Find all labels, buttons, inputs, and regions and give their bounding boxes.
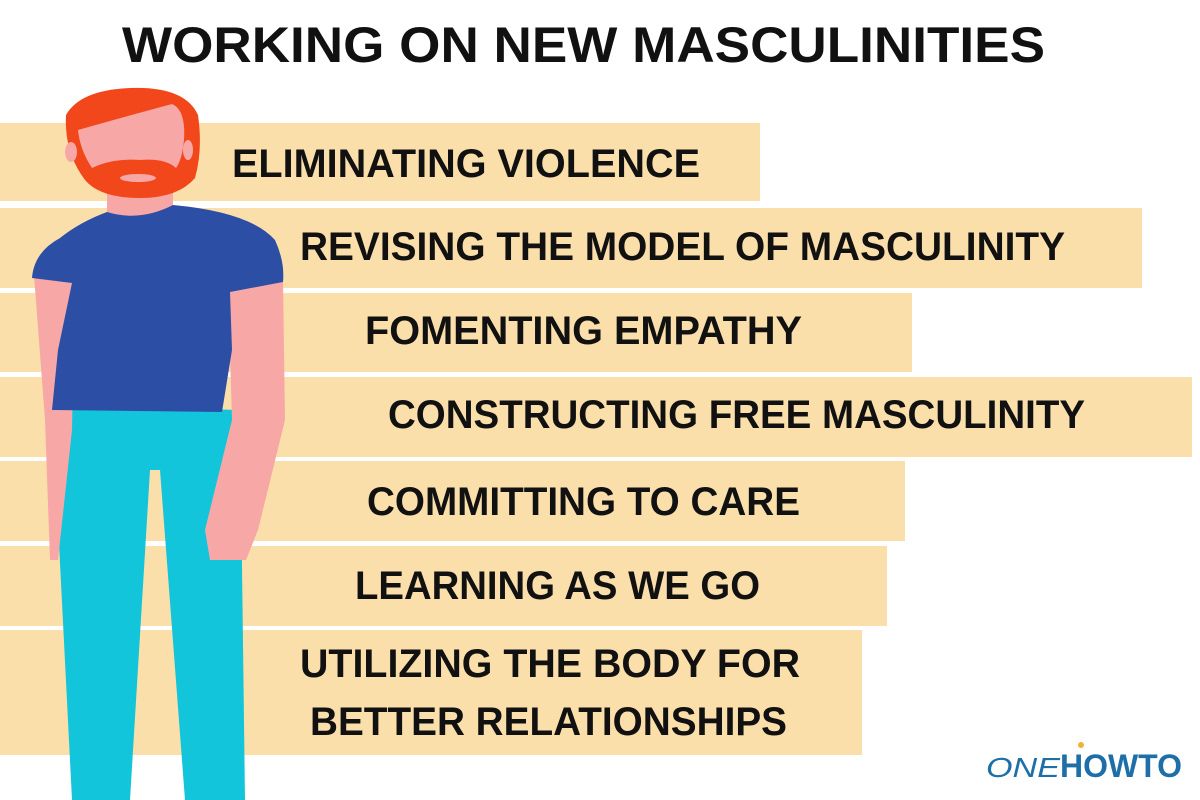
logo: HOWTO [1060,748,1182,784]
item: eliminating violence: ELIMINATING VIOLENCE [232,142,700,186]
bars [0,123,1192,755]
item: utilizing the body: BETTER RELATIONSHIPS [310,700,787,744]
pants [52,405,245,800]
face [78,104,184,168]
item: committing to care: COMMITTING TO CARE [367,480,800,524]
item: learning as we go: LEARNING AS WE GO [355,564,760,608]
item: fomenting empathy: FOMENTING EMPATHY [365,309,802,353]
item: revising the model: REVISING THE MODEL OF MASCULINITY [300,225,1065,269]
ears [65,142,77,162]
neck [107,180,173,220]
mouth [120,174,156,182]
item: constructing free masculinity: CONSTRUCTING FREE MASCULINITY [388,393,1085,437]
shirt [32,205,283,412]
figure: man [32,88,285,800]
logo [986,742,1182,784]
item: utilizing the body [300,642,800,744]
item: utilizing the body: UTILIZING THE BODY FOR [300,642,800,686]
logo: ONE [986,752,1060,783]
hair & beard [66,88,200,198]
arms [34,275,75,560]
title: WORKING ON NEW MASCULINITIES [122,17,1045,73]
